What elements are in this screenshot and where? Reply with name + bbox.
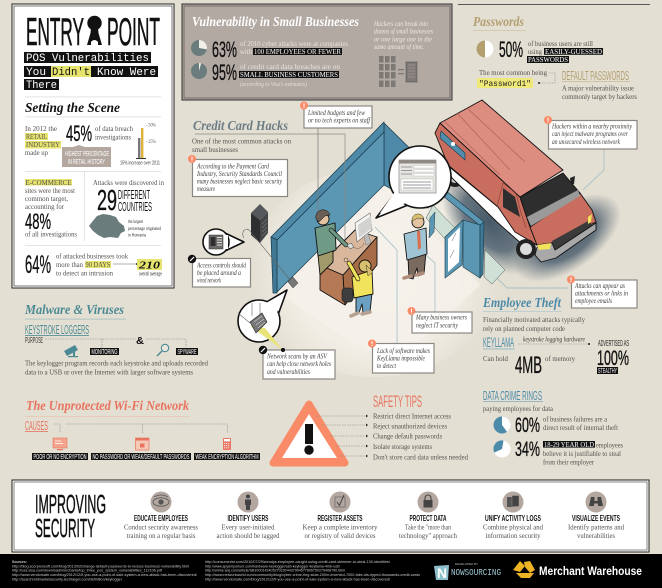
item: unify activity logs: information security <box>486 531 541 540</box>
callout: lack of software <box>368 340 434 373</box>
sources: left column: http://searchmidmarketsecurity.techtarget.com/definition/keylogger <box>12 578 123 582</box>
stat: e-commerce 48 percent: sites were the most <box>25 186 76 195</box>
stat: 50 percent: of business users are still <box>528 39 593 48</box>
stat: 64 percent detection time: of attacked businesses took <box>56 252 128 260</box>
callout: payment card industry: According to the Payment Card <box>196 162 269 170</box>
item: protect data: Take the "more than <box>405 522 451 532</box>
stat: e-commerce 48 percent: 48% <box>25 209 51 234</box>
stat: e-commerce 48 percent: of all investigations <box>25 230 77 238</box>
stat: 29 countries with map of Romania <box>89 178 164 238</box>
label: weak encryption <box>194 453 260 461</box>
item: visualize events: Identify patterns and <box>568 522 624 532</box>
item: identify users: Every user-initiated <box>222 522 275 532</box>
stat: 45 percent retail: of data breach <box>95 124 133 133</box>
stat: 50 percent: PASSWORDS <box>528 55 568 64</box>
stat: 64 percent detection time: overall average <box>139 272 162 278</box>
text: most common password: The most common being <box>479 68 547 77</box>
callout: many business owners <box>408 307 472 333</box>
illustration: van <box>435 100 596 262</box>
icon: binoculars <box>586 492 606 512</box>
subheading: causes <box>25 418 228 433</box>
stat: 29 countries with map of Romania: 29 <box>97 185 117 217</box>
callout: attacks as attachments: Attacks can appear as <box>574 282 625 290</box>
list of tips: Don't store card data unless needed <box>373 452 468 462</box>
icon: wrench <box>259 346 267 354</box>
stat: 95 percent: of credit card data breaches are on <box>240 62 340 71</box>
panel: safety tips: SAFETY TIPS <box>373 393 422 411</box>
heading: SECURITY <box>35 513 95 543</box>
logo: merchant warehouse <box>513 561 642 578</box>
stat: 45 percent retail: RETAIL <box>26 132 47 141</box>
van side <box>435 123 537 245</box>
stat: advertised as 100 percent stealthy: STEALTHY <box>598 368 617 375</box>
callout: attacks as attachments: attachments or links in <box>575 290 628 298</box>
illustration: customer in yellow <box>342 258 373 316</box>
stat: 45 percent retail: In 2012 the <box>25 124 58 133</box>
subheading: causes: CAUSES <box>25 418 48 433</box>
stat: 95 percent: SMALL BUSINESS CUSTOMERS <box>240 70 338 79</box>
item: register assets: REGISTER ASSETS <box>318 514 363 523</box>
heading: credit card hacks: One of the most common attacks on <box>192 136 291 146</box>
callout: access controls: Access controls should <box>196 262 246 270</box>
subheading: default passwords: A major vulnerability issue <box>562 84 635 92</box>
callout: lack of software: Lack of software makes <box>376 347 430 355</box>
list of tips: Restrict direct Internet access <box>373 412 451 420</box>
sources: right column: http://consumerist.com/2010/07/29/wendys-employee-caught-using-credit-card-skimmer-to-steal-130-identities/ <box>205 560 390 564</box>
stat: 45 percent retail: investigations <box>95 132 131 142</box>
callout: access controls: be placed around a <box>197 269 241 277</box>
illustration: counter <box>320 230 377 305</box>
label: poor or no encryption: POOR OR NO ENCRYPTION <box>34 454 86 461</box>
windshield <box>520 173 580 227</box>
text: hackers note: dozens of small businesses <box>374 28 433 36</box>
headlights <box>537 243 551 250</box>
stat: 63 percent: of 2010 cyber attacks were at companies <box>240 39 348 48</box>
callout: lack of software: to detect <box>377 362 397 370</box>
stat: 29 countries with map of Romania: in Romania <box>128 232 146 238</box>
callout: payment card industry: Industry, Security Standards Council <box>196 170 282 178</box>
sources: right column: http://www.spyemporium.com/hardware-keylogger/usb-keylogger-keyllama-4mb-usb/ <box>205 564 340 568</box>
subheading: keyllama <box>483 335 590 350</box>
stat: 95 percent: (according to Visa's estimates) <box>240 81 307 88</box>
item: protect data: PROTECT DATA <box>410 514 447 523</box>
list of tips: Reject unauthorized devices <box>373 422 447 430</box>
label: monitoring: MONITORING <box>92 349 118 356</box>
heading: credit card hacks: small businesses <box>192 145 238 154</box>
item: identify users: IDENTIFY USERS <box>228 514 269 523</box>
icon: monitor <box>53 438 67 450</box>
item: identify users: action should be tagged <box>216 531 280 540</box>
stat: 29 countries with map of Romania: DIFFERENT <box>118 188 150 202</box>
stat: 34 percent: employees <box>596 440 623 450</box>
stat: 4MB: of memory <box>545 354 575 363</box>
item: unify activity logs: Combine physical and <box>483 522 543 532</box>
label: monitoring <box>90 348 119 356</box>
door window <box>503 188 520 217</box>
stat: 45 percent retail: INDUSTRY <box>26 140 60 149</box>
text: intro: Financially motivated attacks typically <box>483 315 585 324</box>
roof ridges <box>445 108 525 175</box>
stat: 34 percent: 18-29 YEAR OLD <box>544 440 595 449</box>
callout: access controls <box>188 255 250 287</box>
subheading: keyllama: keystroke logging hardware <box>523 336 585 344</box>
icon: alert <box>188 155 196 163</box>
icon: alert <box>368 340 376 348</box>
icon: warning triangle <box>273 404 345 463</box>
stat: 50 percent: using <box>528 47 542 56</box>
text: most common password <box>477 68 555 89</box>
stat: 64 percent detection time: to detect an intrusion <box>56 268 113 278</box>
illustration: van shadow <box>423 151 636 300</box>
panel: safety tips <box>273 393 468 463</box>
bar chart: 15 percent increase <box>120 124 160 166</box>
stat: 4MB <box>483 352 575 379</box>
item: visualize events <box>568 492 624 540</box>
stat: 60 percent: of business failures are a <box>543 414 608 424</box>
stat: 64 percent detection time: more than <box>56 260 83 269</box>
icon: Romania map <box>89 214 125 238</box>
callout: attacks as attachments <box>567 276 637 308</box>
item: register assets: Keep a complete inventory <box>302 522 378 532</box>
subheading: keystroke loggers: & <box>136 336 144 347</box>
white side stripe <box>447 165 538 255</box>
icon: eye <box>150 492 172 512</box>
heading: credit card hacks: Credit Card Hacks <box>193 119 288 134</box>
stat: 50 percent: 50% <box>499 37 523 62</box>
subheading: default passwords <box>562 69 637 101</box>
illustration: server tower <box>251 204 268 243</box>
label: no password: NO PASSWORD OR WEAK/DEFAULT PASSWORDS <box>92 454 190 461</box>
speech bubble: network scan <box>238 290 287 352</box>
side window <box>440 131 465 160</box>
item: register assets <box>302 492 378 540</box>
heading: Passwords <box>473 14 524 29</box>
panel: title and setting the scene <box>12 4 174 288</box>
stat: advertised as 100 percent stealthy <box>597 339 629 375</box>
stat: e-commerce 48 percent: common target, <box>25 194 68 203</box>
stat: 34 percent: 34% <box>515 438 540 461</box>
panel: unprotected wi-fi network <box>25 399 260 461</box>
icon: documents <box>502 492 524 512</box>
heading: Malware & Viruses <box>24 302 124 317</box>
panel: vulnerability in small businesses <box>182 4 452 100</box>
stat: 34 percent: believe it is justifiable to steal <box>543 449 621 458</box>
icon: wrench <box>188 255 196 263</box>
icon: alert <box>408 307 416 315</box>
subheading: data crime rings: DATA CRIME RINGS <box>483 388 542 403</box>
panel: improving security <box>12 480 649 552</box>
stat: 64 percent detection time <box>25 251 162 279</box>
stat: 50 percent: EASILY-GUESSED <box>545 47 603 56</box>
logo: nowsourcing: NOWSOURCING <box>451 568 501 578</box>
text: keylogger description: The keylogger program records each keystroke and uploads recorded <box>25 358 208 368</box>
stat: 64 percent detection time: 64% <box>25 251 51 279</box>
bar chart: 15 percent increase: 15% increase over 2011 <box>120 160 160 166</box>
illustration: store wall <box>271 122 428 293</box>
heading: Vulnerability in Small Businesses <box>192 15 359 30</box>
subtitle: Didn't <box>52 67 90 79</box>
panel: title and setting the scene: POINT <box>107 11 160 54</box>
icon: checkbox <box>330 492 350 512</box>
callout: payment card industry <box>188 155 288 196</box>
stat: 60 percent: direct result of internal theft <box>543 423 619 432</box>
callout: access controls: wired network <box>197 276 222 284</box>
stat: 64 percent detection time: 90 DAYS <box>86 260 110 269</box>
subheading: data crime rings <box>483 388 554 413</box>
callout: network scans: and vulnerabilities <box>267 368 310 376</box>
stat: 29 countries with map of Romania: COUNTRIES <box>118 200 152 214</box>
stat: 29 countries with map of Romania: Attacks were discovered in <box>93 178 164 187</box>
item: identify users <box>216 492 280 540</box>
subtitle: There <box>26 80 57 92</box>
heading: Employee Theft <box>482 296 562 311</box>
sources: right column: http://www.vendorsafe.com/blog/2012/12/if-you-use-a-point-of-sale-system-a-new-attack-has-been-discovered/ <box>205 578 390 582</box>
icon: calculator <box>223 438 231 450</box>
logo: nowsourcing: DEVELOPED BY <box>455 562 478 566</box>
stat: 45 percent retail: HIGHEST PERCENTAGE <box>65 151 109 158</box>
callout: many business owners: Many business owners <box>415 314 467 322</box>
item: visualize events: VISUALIZE EVENTS <box>572 514 620 523</box>
stat: e-commerce 48 percent <box>25 178 77 238</box>
callout: hackers within proximity: Hackers within a nearby proximity <box>551 122 633 130</box>
text: hackers note: Hackers can break into <box>373 21 429 28</box>
icon: alert <box>300 102 308 110</box>
illustration: clerk in green shirt <box>315 210 346 275</box>
sources: right column: http://www.networkworld.com/community/blog/cyber-crime-ring-stole-200m-invented-7000-fake-ids-ripped-thousands-credit-cards <box>205 573 420 577</box>
stat: 60 percent <box>494 414 619 437</box>
panel: malware and viruses <box>24 302 208 376</box>
text: hackers note: or one large one in the <box>374 36 432 44</box>
bar chart: 15 percent increase: - 50% <box>146 124 156 128</box>
sources: left column: Sources: <box>12 560 27 564</box>
bumper <box>535 223 596 262</box>
callout: payment card industry: measure <box>197 185 215 193</box>
stat: 4MB: Can hold <box>483 354 508 363</box>
heading <box>35 491 106 543</box>
text: ADVERTISED AS <box>598 339 629 348</box>
callout: network scans <box>259 346 335 379</box>
stat: e-commerce 48 percent: accounting for <box>25 202 64 211</box>
stat: 34 percent: from their employer <box>543 458 594 466</box>
callout: network scans: can help close network holes <box>267 360 331 368</box>
heading: Setting the Scene: Setting the Scene <box>25 100 120 115</box>
heading: credit card hacks <box>192 119 291 154</box>
callout: limited budgets <box>300 102 372 128</box>
footer <box>0 554 662 588</box>
stat: 64 percent detection time: 210 <box>138 260 161 272</box>
rear wheel <box>446 169 464 187</box>
bar chart: 15 percent increase: - 25% <box>146 140 156 145</box>
subheading: keystroke loggers: KEYSTROKE LOGGERS <box>25 322 89 337</box>
callout: hackers within proximity: an unsecured wireless network <box>552 138 621 146</box>
list of tips: Change default passwords <box>373 432 442 440</box>
van hood <box>530 193 596 245</box>
subheading: keystroke loggers: PURPOSE <box>25 336 43 345</box>
callout: many business owners: neglect IT security <box>416 322 459 330</box>
stat: 29 countries with map of Romania: the largest <box>128 219 143 225</box>
callout: limited budgets: or no tech experts on staff <box>308 116 371 124</box>
text: hackers note <box>373 21 433 51</box>
icon: magnifier <box>157 344 169 356</box>
item: protect data: technology" approach <box>399 531 457 540</box>
illustration: man in tie <box>404 214 427 279</box>
icon: security camera <box>64 345 78 357</box>
label: no password <box>91 453 191 461</box>
callout lines <box>195 128 604 343</box>
subtitle <box>24 52 158 92</box>
logo: nowsourcing: N <box>437 565 447 581</box>
illustration: door and mats <box>426 190 505 284</box>
callout: network scans: Network scans by an ASV <box>266 352 328 360</box>
sources: right column <box>205 560 420 582</box>
subheading: default passwords: commonly target by hackers <box>562 92 637 101</box>
subheading: data crime rings: paying employees for data <box>483 404 554 413</box>
subtitle: POS Vulnerabilities <box>26 53 149 65</box>
stat: 63 percent: with <box>240 47 252 56</box>
stat: 63 percent: 100 EMPLOYEES OR FEWER <box>254 47 341 56</box>
subtitle: You <box>26 67 46 79</box>
stat: 63 percent <box>191 37 348 62</box>
illustration: monitor and card reader <box>347 213 372 249</box>
subheading: keyllama: KEYLLAMA <box>483 335 514 350</box>
sources: right column: http://online.wsj.com/article/SB10001424052702304437904577806750279408790.html <box>205 568 345 572</box>
label: weak encryption: WEAK ENCRYPTION ALGORITHM <box>196 454 259 461</box>
stat: 45 percent retail <box>25 121 133 167</box>
sources: left column: http://www.vendorsafe.com/blog/2012/12/if-you-use-a-point-of-sale-system-a-new-attack-has-been-discovered/ <box>12 573 197 577</box>
panel: passwords <box>473 14 637 101</box>
illustration: shop floor <box>250 167 500 377</box>
sources: left column: http://usa.visa.com/download/merchants/top_three_pos_system_vulnerabilities_112106.pdf <box>12 568 162 572</box>
stat: 34 percent <box>493 438 623 466</box>
title: Entry Point: ENTRY <box>26 11 84 54</box>
stat: 95 percent <box>191 60 340 88</box>
sources: left column: http://blog.scorpionsoft.com/blog/2013/02/change-default-passwords-to-reduce-business-vulnerability.html <box>12 564 189 568</box>
stat: e-commerce 48 percent: E-COMMERCE <box>26 178 72 187</box>
stat: advertised as 100 percent stealthy: 100% <box>597 347 629 370</box>
speech bubble: keypad <box>203 229 244 255</box>
stat: 60 percent: 60% <box>515 414 540 437</box>
speech bubble: data form <box>376 146 451 218</box>
text: intro: rely on planned computer code <box>483 324 566 333</box>
stat: 50 percent <box>476 37 603 64</box>
item: educate employees <box>124 492 198 540</box>
logo: nowsourcing <box>434 562 501 581</box>
stat: 4MB: 4MB <box>515 352 542 379</box>
label: poor or no encryption <box>32 453 88 461</box>
item: register assets: or registry of valid devices <box>304 531 376 540</box>
subheading: keystroke loggers <box>25 322 186 349</box>
icon: alert <box>567 276 575 284</box>
icon: small buildings equal one large <box>379 56 417 87</box>
icon: person <box>238 492 258 512</box>
callout: lack of software: KeyLlama impossible <box>376 354 425 362</box>
icon: lock <box>418 492 438 512</box>
icon: browser lock <box>136 438 149 450</box>
list of tips: Isolate storage systems <box>373 442 432 451</box>
stat: 45 percent retail: made up <box>25 148 48 157</box>
text: hackers note: same amount of time. <box>374 44 424 51</box>
text: keylogger description: data to a USB or over the Internet with larger software systems <box>25 368 193 376</box>
subtitle: Know Were <box>97 67 156 79</box>
label: spyware <box>176 348 198 356</box>
item: unify activity logs <box>483 492 543 540</box>
front wheel <box>516 239 536 259</box>
item: educate employees: EDUCATE EMPLOYEES <box>134 514 188 523</box>
callout: limited budgets: Limited budgets and few <box>307 109 365 117</box>
item: unify activity logs: UNIFY ACTIVITY LOGS <box>485 514 541 523</box>
callout: payment card industry: many businesses neglect basic security <box>197 178 283 186</box>
sources: left column <box>12 560 197 582</box>
logo: merchant warehouse: Merchant Warehouse <box>539 566 642 578</box>
text: most common password: "Password1" <box>479 80 531 89</box>
grille <box>552 220 592 250</box>
panel: employee theft <box>482 296 629 466</box>
stat: 63 percent: 63% <box>212 37 237 62</box>
stat: 45 percent retail: IN RETAIL HISTORY <box>68 159 105 166</box>
item: protect data <box>399 492 457 540</box>
text: intro <box>483 315 585 333</box>
label: spyware: SPYWARE <box>178 349 197 356</box>
text: keylogger description <box>25 358 208 376</box>
stat: 45 percent retail: 45% <box>66 121 92 146</box>
callout: attacks as attachments: employee emails <box>575 297 612 305</box>
callout: hackers within proximity <box>544 116 637 149</box>
list of tips <box>316 412 468 462</box>
item: visualize events: vulnerabilities <box>577 531 615 540</box>
callout: hackers within proximity: can inject malware programs over <box>552 130 628 138</box>
van roof <box>440 100 563 197</box>
item: educate employees: Conduct security awareness <box>124 522 198 532</box>
item: educate employees: training on a regular basis <box>126 531 196 540</box>
stat: 29 countries with map of Romania: percentage originated <box>128 226 161 232</box>
mirror <box>570 176 575 184</box>
stat: 95 percent: 95% <box>212 60 237 85</box>
icon: alert <box>544 116 552 124</box>
panel: improving security: IMPROVING <box>35 491 106 519</box>
heading: The Unprotected Wi-Fi Network <box>26 399 189 414</box>
illustration: wire to card reader <box>243 229 298 288</box>
